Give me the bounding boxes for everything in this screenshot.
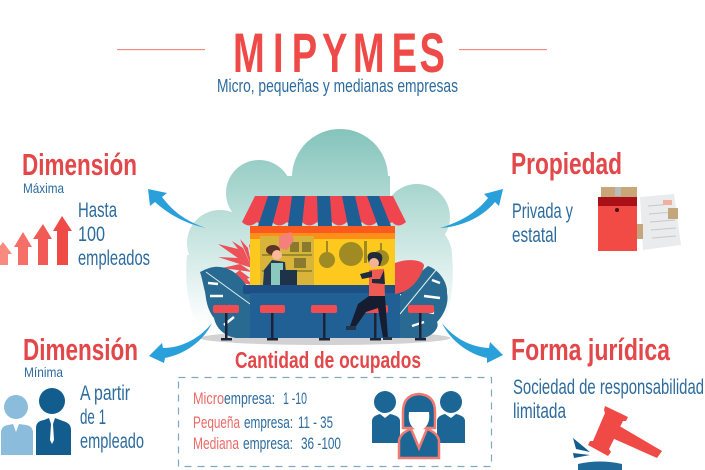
- text: privada y estatal: estatal: [512, 224, 557, 247]
- text: hasta 100 empleados: Hasta: [78, 199, 117, 222]
- heading: cantidad de ocupados: Cantidad de ocupados: [235, 347, 421, 373]
- woman: [263, 232, 297, 285]
- icon: team of three: [372, 391, 465, 458]
- box: company sizes: empresa:: [243, 434, 293, 453]
- icon: gavel: [573, 406, 662, 470]
- title: MIPYMES: [233, 23, 445, 85]
- text: hasta 100 empleados: empleados: [78, 247, 150, 270]
- text: a partir de 1 empleado: empleado: [80, 430, 144, 453]
- text: privada y estatal: [512, 200, 573, 247]
- shop wall: [250, 226, 395, 286]
- red leaf right: [395, 260, 424, 294]
- box: company sizes: Micro: [193, 389, 224, 408]
- heading: dimensión mínima: Dimensión: [23, 332, 138, 367]
- monstera leaf left: [200, 267, 252, 338]
- monstera leaf right: [398, 266, 448, 338]
- arrow: up right: [440, 189, 503, 228]
- heading: dimensión máxima: [22, 147, 137, 196]
- box: company sizes: 11 - 35: [298, 413, 333, 432]
- man: [346, 252, 392, 340]
- icon: folder and documents: [598, 187, 681, 251]
- text: a partir de 1 empleado: de 1: [80, 406, 106, 429]
- heading: dimensión máxima: Máxima: [23, 180, 64, 196]
- ground shadow: [200, 331, 450, 345]
- heading: propiedad: Propiedad: [511, 146, 622, 181]
- heading: dimensión mínima: Mínima: [24, 364, 63, 380]
- text: a partir de 1 empleado: [80, 382, 144, 453]
- box: company sizes: 36 -100: [301, 434, 341, 453]
- box: company sizes: empresa:: [244, 413, 293, 432]
- text: a partir de 1 empleado: A partir: [80, 382, 130, 405]
- box: company sizes: Pequeña: [193, 413, 240, 432]
- subtitle: Micro, pequeñas y medianas empresas: [217, 76, 458, 96]
- heading: dimensión mínima: [23, 332, 138, 380]
- shelves: [260, 236, 314, 286]
- text: hasta 100 empleados: [78, 199, 150, 270]
- icon: two people: [1, 388, 71, 455]
- text: hasta 100 empleados: 100: [78, 223, 105, 246]
- box: company sizes: Mediana: [193, 434, 239, 453]
- red leaf left: [218, 239, 254, 285]
- arrow: down right: [442, 323, 503, 363]
- box: company sizes: [178, 378, 492, 466]
- hanging pans: [319, 241, 389, 268]
- awning: [242, 196, 406, 226]
- illustration: market stall with cloud: [186, 129, 453, 345]
- arrow: down left: [149, 323, 212, 363]
- box: company sizes: 1 -10: [283, 389, 307, 408]
- heading: dimensión máxima: Dimensión: [22, 147, 137, 182]
- text: sociedad de responsabilidad limitada: limitada: [513, 400, 566, 423]
- counter: [243, 285, 403, 338]
- stools: [213, 305, 434, 340]
- box: company sizes: empresa:: [224, 389, 275, 408]
- text: sociedad de responsabilidad limitada: [513, 376, 704, 423]
- cloud background: [186, 129, 453, 336]
- text: privada y estatal: Privada y: [512, 200, 573, 223]
- arrow: up left: [148, 189, 206, 228]
- icon: rising arrows: [0, 216, 72, 265]
